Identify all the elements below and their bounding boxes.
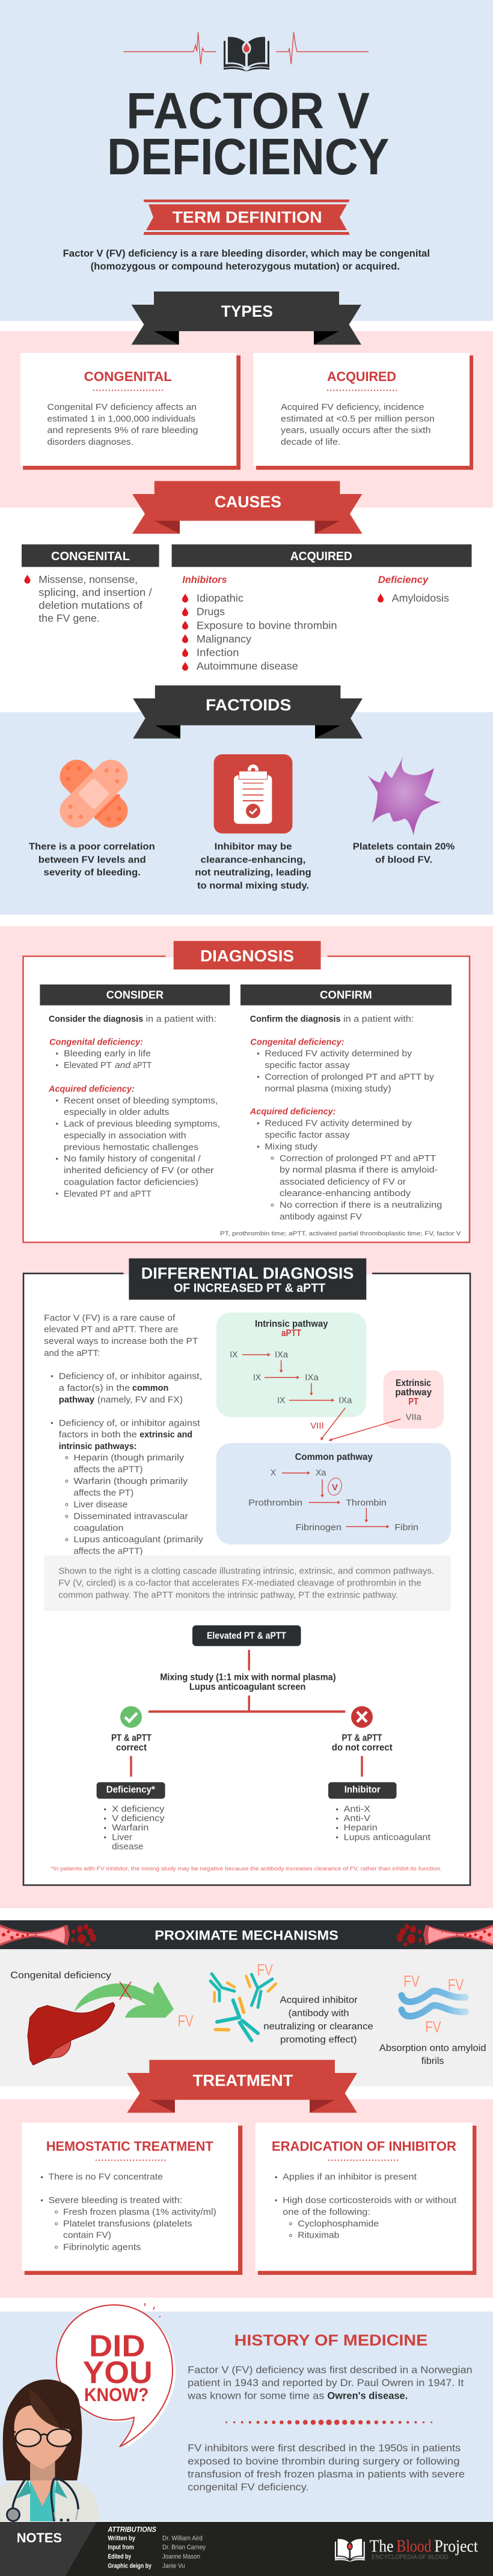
text: clearance-enhancing: not neutralizing, leading [195,868,311,878]
mechanism: absorption onto amyloid fibrils: FV [425,2018,441,2036]
attributions: Written by [108,2535,136,2542]
intrinsic pathway box: IXa [275,1350,289,1360]
column: confirm: specific factor assay [265,1060,350,1070]
card: congenital type [20,353,240,470]
branch: PT and aPTT correct: Warfarin [112,1823,149,1833]
card: acquired type: estimated at <0.5 per million person [281,414,435,424]
callout: cascade explanation: Shown to the right is a clotting cascade illustrating intrinsic, extrinsic, and common pathways. [58,1566,434,1576]
causes: acquired column: Autoimmune disease [197,660,298,672]
ribbon heading: factoids: FACTOIDS [206,696,291,714]
icon: red cross on arrow [120,1982,132,2000]
column: consider: Congenital deficiency: [49,1037,143,1048]
intrinsic pathway box: IXa [338,1396,352,1405]
panel background: header [0,0,493,321]
banner: proximate mechanisms: PROXIMATE MECHANISMS [155,1928,338,1943]
text: causes of elevated PT and aPTT: affects the aPTT) [73,1546,142,1557]
card: acquired type: ACQUIRED [327,369,396,384]
arrow: liver to FV [74,1982,174,2018]
text: Owren's disease: was known for some time as [187,2390,324,2402]
text: causes of elevated PT and aPTT: Deficiency of, or inhibitor against, [59,1372,202,1381]
banner: term definition: TERM DEFINITION [173,208,322,226]
text: clearance-enhancing: clearance-enhancing, [201,855,305,865]
card: hemostatic treatment [22,2123,242,2275]
text: definition: (homozygous or compound heterozygous mutation) or acquired. [91,261,400,272]
causes: acquired column: Exposure to bovine thrombin [197,619,337,631]
icon: clipboard [214,754,292,834]
text: causes of elevated PT and aPTT: a factor(s) in the [59,1383,130,1393]
text: causes of elevated PT and aPTT: Lupus anticoagulant (primarily [73,1534,203,1545]
callout: cascade explanation: common pathway. The aPTT monitors the intrinsic pathway, PT the extrinsic pathway. [58,1590,398,1601]
attributions: Joanne Mason [162,2553,200,2560]
text: causes of elevated PT and aPTT: several ways to increase both the PT [44,1336,198,1346]
text: causes of elevated PT and aPTT: extrinsic and [139,1429,192,1439]
branch: PT and aPTT do not correct: Heparin [344,1823,378,1833]
header logo with heartbeat lines [123,32,369,71]
ribbon heading: causes [132,481,362,534]
card: acquired type: decade of life. [281,437,340,447]
text: causes of elevated PT and aPTT: Heparin (though primarily [73,1453,185,1463]
footnote: mixing study: *In patients with FV inhibitor, the mixing study may be negative because the antibody increases clearance of FV, rather than inhibit its function. [51,1866,442,1872]
heading: differential diagnosis: OF INCREASED PT & aPTT [174,1281,325,1295]
common pathway box: Fibrin [394,1522,418,1533]
text: clearance-enhancing [195,841,311,891]
card: eradication of inhibitor: ERADICATION OF INHIBITOR [272,2138,456,2153]
text: causes of elevated PT and aPTT: common [132,1383,168,1393]
card: hemostatic treatment: Fibrinolytic agents [63,2242,141,2252]
causes: acquired column: Malignancy [197,633,251,645]
text: Owren's disease [187,2364,473,2402]
column: consider: Bleeding early in life [64,1049,151,1059]
mechanism: acquired inhibitor: neutralizing or clearance [263,2022,373,2032]
ribbon heading: types [132,291,361,345]
column: confirm: Mixing study [265,1142,318,1152]
column: confirm: Congenital deficiency: [250,1037,344,1048]
common pathway box: Common pathway [295,1452,373,1462]
branch: PT and aPTT correct: Liver [112,1832,132,1842]
branch: PT and aPTT correct: X deficiency [112,1804,165,1814]
card: eradication of inhibitor: one of the following: [283,2207,370,2217]
column: consider [40,984,230,1199]
intrinsic pathway box: Intrinsic pathway [255,1319,328,1329]
mechanism: absorption onto amyloid fibrils: fibrils [421,2056,444,2066]
text: poor correlation: between FV levels and [38,855,146,865]
arrows into common pathway: VIII [310,1421,324,1431]
column: consider: Lack of previous bleeding symptoms, [64,1119,220,1129]
causes: acquired column: Infection [197,646,239,658]
column: confirm: Correction of prolonged PT and aPTT [280,1153,436,1164]
ribbon heading: factoids [133,685,363,739]
causes: acquired column: Inhibitors [182,574,227,585]
card: hemostatic treatment: There is no FV concentrate [48,2172,163,2182]
panel: diagnosis [23,941,470,1242]
icon: amyloid fibrils [402,1991,465,2016]
text: causes of elevated PT and aPTT: pathway [59,1394,95,1405]
arrows into common pathway [310,1408,400,1441]
logo: the blood project: Project [434,2538,478,2556]
column: consider: Elevated PT and aPTT [64,1189,152,1199]
card: hemostatic treatment: Severe bleeding is treated with: [48,2195,182,2205]
column: consider: Acquired deficiency: [48,1084,135,1094]
causes: congenital column: CONGENITAL [51,550,130,563]
text: Owren's disease: Owren's disease. [327,2390,408,2402]
extrinsic pathway box: Extrinsic [396,1378,431,1388]
branch: PT and aPTT correct: Deficiency* [106,1785,156,1795]
causes: acquired column: ACQUIRED [290,550,352,563]
text: clearance-enhancing: Inhibitor may be [215,841,292,852]
text: platelets contain FV: Platelets contain 20% [353,841,455,852]
title: DEFICIENCY [107,129,390,186]
text: platelets contain FV [353,841,455,865]
column: consider: inherited deficiency of FV (or other [64,1165,214,1176]
mechanism: absorption onto amyloid fibrils: FV [448,1976,464,1994]
icon: crossed bandages [54,754,134,834]
mechanism: congenital deficiency [10,1971,194,2065]
attributions: ATTRIBUTIONS [107,2527,156,2534]
title: FACTOR V [126,83,370,139]
text: causes of elevated PT and aPTT: and the aPTT: [44,1348,100,1358]
mechanism: absorption onto amyloid fibrils [379,1973,486,2066]
column: confirm: CONFIRM [320,989,372,1001]
attributions: Input from [108,2544,134,2551]
heading: differential diagnosis [129,1259,366,1299]
panel: differential diagnosis [23,1259,470,1885]
speech bubble: did you know: YOU [83,2355,153,2390]
causes: acquired column: Idiopathic [197,592,243,604]
text: causes of elevated PT and aPTT [44,1313,203,1557]
icon: check [120,1706,142,1728]
text: causes of elevated PT and aPTT: Liver disease [73,1500,127,1510]
branch: PT and aPTT correct [97,1706,165,1852]
common pathway box: Prothrombin [248,1498,302,1508]
text: clearance-enhancing: to normal mixing study. [197,881,309,891]
icon: platelet [367,755,441,835]
attributions: Dr. Brian Carney [162,2544,206,2551]
card: hemostatic treatment: HEMOSTATIC TREATMENT [46,2138,213,2153]
text: causes of elevated PT and aPTT: Warfarin (though primarily [73,1476,188,1486]
card: acquired type [254,353,473,470]
extrinsic pathway box: pathway [395,1387,432,1397]
card: hemostatic treatment: Fresh frozen plasma (1% activity/ml) [63,2207,216,2217]
mechanism: acquired inhibitor: promoting effect) [280,2034,357,2045]
column: confirm: by normal plasma if there is amyloid- [280,1165,438,1175]
heading: history of medicine: HISTORY OF MEDICINE [234,2331,427,2349]
column: confirm: antibody against FV [280,1212,362,1222]
panel background: diagnosis [0,926,493,1908]
text: causes of elevated PT and aPTT: Disseminated intravascular [73,1511,188,1521]
flowchart: mixing study [97,1625,431,1852]
panel background: types [0,331,493,507]
branch: PT and aPTT do not correct: do not correct [332,1742,393,1753]
attributions: Graphic deign by [108,2563,152,2570]
column: consider: especially in older adults [64,1107,169,1117]
column: consider: especially in association with [64,1131,186,1141]
footnote: abbreviations: PT, prothrombin time; aPTT, activated partial thromboplastic time; FV, factor V [220,1230,461,1237]
connector [248,1650,250,1670]
causes: acquired column: Amyloidosis [392,592,449,604]
ribbon heading: causes: CAUSES [215,493,281,511]
card: eradication of inhibitor: Rituximab [298,2230,339,2241]
common pathway box: Fibrinogen [296,1522,341,1533]
common pathway box: Thrombin [346,1498,387,1508]
column: confirm: normal plasma (mixing study) [265,1084,391,1094]
column: consider: aPTT [133,1060,152,1070]
branch: PT and aPTT do not correct: Anti-V [344,1813,370,1824]
logo: the blood project [335,2538,478,2562]
column: confirm [240,984,452,1222]
causes: congenital column [22,545,159,624]
column: confirm: Confirm the diagnosis [250,1014,340,1024]
causes: acquired column [172,545,471,672]
text: definition: Factor V (FV) deficiency is a rare bleeding disorder, which may be congenital [63,248,430,259]
column: consider: Recent onset of bleeding symptoms, [64,1096,218,1106]
card: acquired type: Acquired FV deficiency, incidence [281,402,424,412]
mechanism: acquired inhibitor [210,1961,373,2045]
connector: branch [149,1695,345,1712]
mechanism: absorption onto amyloid fibrils: Absorption onto amyloid [379,2043,486,2053]
extrinsic pathway box: PT [408,1397,418,1407]
card: eradication of inhibitor: High dose corticosteroids with or without [283,2195,457,2205]
column: confirm: Reduced FV activity determined by [265,1119,412,1129]
text: platelets contain FV: of blood FV. [375,855,432,865]
text: poor correlation: There is a poor correlation [29,841,155,852]
branch: PT and aPTT do not correct: PT & aPTT [341,1733,382,1744]
column: confirm: Reduced FV activity determined by [265,1049,412,1059]
causes: congenital column: Missense, nonsense, [38,573,138,585]
column: confirm: Correction of prolonged PT and aPTT by [265,1072,434,1082]
speech bubble: did you know: KNOW? [84,2384,149,2405]
footer [0,2522,493,2576]
branch: PT and aPTT correct: disease [112,1842,143,1852]
divider: dots [225,2420,432,2425]
title [107,83,390,186]
intrinsic pathway box: aPTT [281,1328,301,1338]
branch: PT and aPTT do not correct: Inhibitor [344,1785,381,1795]
card: eradication of inhibitor: Applies if an inhibitor is present [283,2172,417,2182]
column: consider: previous hemostatic challenges [64,1142,198,1153]
banner: term definition [143,200,350,235]
causes: acquired column: Drugs [197,606,225,618]
mechanism: congenital deficiency: FV [178,2012,194,2030]
branch: PT and aPTT do not correct [328,1706,431,1842]
text: FV inhibitors history: FV inhibitors were first described in the 1950s in patients [188,2443,461,2454]
column: confirm: Acquired deficiency: [250,1106,336,1117]
column: confirm: specific factor assay [265,1130,350,1140]
card: congenital type: and represents 9% of rare bleeding [47,426,198,436]
ribbon heading: types: TYPES [221,302,273,320]
text: Owren's disease: patient in 1943 and reported by Dr. Paul Owren in 1947. It [188,2377,464,2388]
chart: clotting cascade [216,1313,451,1545]
ribbon heading: treatment: TREATMENT [193,2072,293,2090]
logo: the blood project: The [369,2538,393,2556]
heading: notes: NOTES [17,2530,62,2545]
panel background: proximate mechanisms [0,1949,493,2086]
column: consider: Elevated PT [64,1060,112,1070]
intrinsic pathway box [216,1313,366,1417]
common pathway box [216,1443,451,1545]
attributions: Edited by [108,2553,132,2560]
intrinsic pathway box: IXa [305,1373,319,1382]
text: Owren's disease: Factor V (FV) deficiency was first described in a Norwegian [188,2364,473,2375]
branch: PT and aPTT do not correct: Lupus anticoagulant [344,1832,431,1842]
common pathway box: V [332,1482,338,1493]
intrinsic pathway box: IX [277,1396,285,1405]
heading: diagnosis [174,941,321,969]
speech bubble: did you know: DID [89,2329,145,2363]
extrinsic pathway box: VIIa [406,1412,421,1423]
node: mixing study [160,1673,336,1692]
column: confirm: in a patient with: [343,1014,414,1024]
mechanism: acquired inhibitor: Acquired inhibitor [280,1995,358,2006]
text: causes of elevated PT and aPTT: Deficiency of, or inhibitor against [59,1418,200,1428]
mechanism: acquired inhibitor: FV [257,1961,273,1979]
common pathway box: Xa [316,1468,326,1478]
card: eradication of inhibitor [256,2123,476,2275]
callout: cascade explanation: FV (V, circled) is a co-factor that accelerates FX-mediated cleavage of prothrombin in the [58,1578,421,1588]
column: consider: No family history of congenital / [64,1154,201,1164]
icon: antibodies [210,1974,276,2040]
panel background: treatment [0,2099,493,2298]
common pathway box: X [271,1468,276,1478]
node: elevated PT and aPTT [192,1625,301,1646]
panel background: history of medicine [0,2312,493,2521]
illustration: doctor [0,2379,101,2522]
node: mixing study: Mixing study (1:1 mix with normal plasma) [160,1673,336,1683]
mechanism: absorption onto amyloid fibrils: FV [403,1973,420,1991]
logo: the blood project: Blood [397,2538,432,2556]
card: congenital type: CONGENITAL [84,369,172,384]
icon: left blood vessel [0,1924,96,1946]
extrinsic pathway box [384,1370,444,1429]
text: causes of elevated PT and aPTT: coagulation [73,1523,124,1533]
column: consider: and [115,1060,131,1070]
text: causes of elevated PT and aPTT: affects the PT) [73,1488,133,1498]
panel background: factoids [0,712,493,915]
causes: congenital column: the FV gene. [38,612,100,624]
card: congenital type: estimated 1 in 1,000,000 individuals [47,414,195,424]
text: poor correlation: severity of bleeding. [44,868,141,878]
column: consider: coagulation factor deficiencies) [64,1177,198,1187]
factoid: clipboard [195,754,311,891]
column: confirm: associated deficiency of FV or [280,1177,406,1187]
factoid: bandage [29,754,155,878]
card: hemostatic treatment: Platelet transfusions (platelets [63,2218,192,2229]
card: hemostatic treatment: contain FV) [63,2230,111,2241]
text: causes of elevated PT and aPTT: Factor V (FV) is a rare cause of [44,1313,176,1323]
card: eradication of inhibitor: Cyclophosphamide [298,2218,379,2229]
node: elevated PT and aPTT: Elevated PT & aPTT [207,1631,286,1641]
text: definition [63,248,430,272]
icon: book [335,2539,365,2562]
column: consider: CONSIDER [106,989,164,1001]
heading: differential diagnosis: DIFFERENTIAL DIAGNOSIS [141,1265,354,1283]
branch: PT and aPTT correct: V deficiency [112,1813,165,1824]
logo: the blood project: ENCYCLOPEDIA OF BLOOD [372,2554,449,2560]
text: poor correlation [29,841,155,878]
card: congenital type: disorders diagnoses. [47,437,133,447]
branch: PT and aPTT do not correct: Anti-X [344,1804,370,1814]
branch: PT and aPTT correct: correct [116,1742,147,1753]
text: causes of elevated PT and aPTT: elevated PT and aPTT. There are [44,1325,178,1335]
mechanism: acquired inhibitor: (antibody with [289,2009,349,2019]
icon: right blood vessel [397,1924,493,1946]
speech bubble: did you know [57,2303,176,2449]
text: FV inhibitors history: transfusion of fresh frozen plasma in patients with severe [188,2468,465,2480]
icon: liver [28,2003,115,2065]
attributions: Janie Vu [162,2563,185,2570]
callout: cascade explanation [44,1555,451,1611]
text: causes of elevated PT and aPTT: intrinsic pathways: [59,1441,137,1451]
text: FV inhibitors history [188,2443,465,2493]
icon: cross [351,1706,373,1728]
attributions: Dr. William Aird [162,2535,203,2542]
ribbon heading: treatment [127,2060,357,2113]
text: FV inhibitors history: exposed to bovine thrombin during surgery or following [188,2455,460,2467]
node: mixing study: Lupus anticoagulant screen [189,1682,305,1692]
causes: acquired column: Deficiency [378,574,429,585]
text: causes of elevated PT and aPTT: (namely, FV and FX) [97,1394,183,1405]
card: congenital type: Congenital FV deficiency affects an [47,402,197,412]
branch: PT and aPTT correct: PT & aPTT [111,1733,152,1744]
column: consider: Consider the diagnosis [49,1014,143,1024]
column: confirm: No correction if there is a neutralizing [280,1200,442,1210]
causes: congenital column: splicing, and insertion / [38,586,152,598]
column: confirm: clearance-enhancing antibody [280,1188,411,1198]
heading: diagnosis: DIAGNOSIS [200,947,294,965]
intrinsic pathway box: IX [230,1350,237,1360]
text: FV inhibitors history: congenital FV deficiency. [188,2482,309,2493]
column: consider: in a patient with: [145,1014,216,1024]
causes: congenital column: deletion mutations of [38,599,142,611]
banner: proximate mechanisms [0,1920,493,1949]
attributions [107,2527,206,2570]
card: acquired type: years, usually occurs after the sixth [281,426,430,436]
text: causes of elevated PT and aPTT: affects the aPTT) [73,1464,142,1475]
intrinsic pathway box: IX [253,1373,261,1382]
mechanism: congenital deficiency: Congenital deficiency [10,1971,111,1981]
text: causes of elevated PT and aPTT: factors in both the [59,1429,137,1439]
factoid: platelet [353,755,455,865]
